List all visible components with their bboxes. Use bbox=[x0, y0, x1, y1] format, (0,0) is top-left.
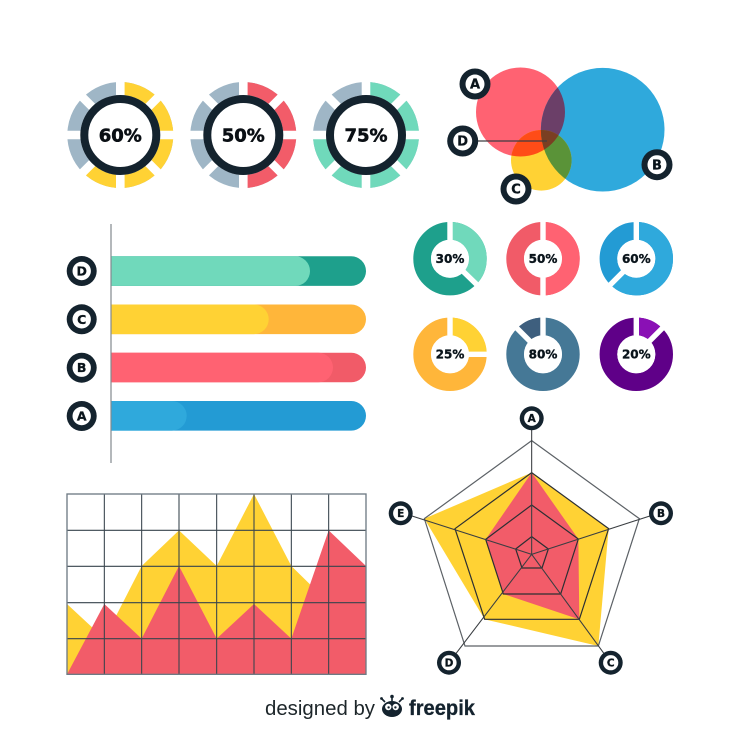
segmented ring: 60% bbox=[65, 80, 175, 190]
donut: 30% bbox=[422, 221, 478, 287]
yellow area series bbox=[67, 494, 366, 674]
donut: 20% bbox=[608, 316, 664, 382]
segmented ring: 75%: 75% bbox=[344, 126, 388, 147]
radar badge B bbox=[649, 501, 673, 525]
donut: 60% bbox=[608, 221, 664, 287]
footer credit bbox=[265, 695, 475, 720]
radar badge D: D bbox=[445, 657, 454, 669]
segmented ring: 50%: 50% bbox=[222, 126, 265, 147]
red radar series bbox=[486, 473, 579, 619]
venn badge C: C bbox=[511, 183, 521, 198]
segmented ring: 50% bbox=[188, 80, 298, 190]
bar B bbox=[111, 353, 366, 382]
segmented ring: 60%: 60% bbox=[99, 126, 142, 147]
venn badge C bbox=[500, 174, 532, 204]
radar badge D bbox=[437, 651, 461, 675]
bar badge C: C bbox=[77, 312, 86, 327]
horizontal bar chart bbox=[67, 224, 366, 463]
yellow radar series bbox=[424, 473, 609, 646]
donut: 80% bbox=[504, 315, 582, 394]
donut: 20%: 20% bbox=[622, 348, 651, 362]
venn badge A bbox=[460, 68, 490, 100]
donut: 80%: 80% bbox=[529, 348, 557, 362]
radar badge A: A bbox=[528, 413, 537, 425]
donut: 25% bbox=[422, 316, 488, 382]
venn badge D: D bbox=[457, 135, 468, 150]
footer credit: designed by bbox=[265, 698, 375, 720]
venn badge D bbox=[447, 126, 478, 156]
bar badge A bbox=[67, 401, 97, 431]
bar badge B: B bbox=[77, 360, 86, 375]
bar A bbox=[111, 401, 366, 431]
venn badge B bbox=[642, 149, 672, 180]
donut: 30%: 30% bbox=[436, 252, 464, 266]
bar badge C bbox=[67, 304, 97, 334]
venn badge B: B bbox=[652, 158, 662, 173]
donut: 60%: 60% bbox=[622, 252, 651, 266]
radar badge C: C bbox=[607, 657, 615, 669]
bar badge D bbox=[67, 256, 97, 286]
radar badge E bbox=[389, 501, 413, 525]
radar badge A bbox=[520, 406, 544, 430]
footer credit: freepik bbox=[409, 697, 475, 720]
venn badge A: A bbox=[470, 78, 480, 93]
bar badge A: A bbox=[77, 408, 87, 424]
donut: 50%: 50% bbox=[529, 252, 557, 266]
bar badge B bbox=[67, 353, 97, 383]
segmented ring: 75% bbox=[311, 80, 421, 190]
area chart bbox=[67, 494, 366, 674]
donut: 25%: 25% bbox=[436, 348, 464, 362]
donut: 50% bbox=[515, 221, 571, 297]
bar D bbox=[111, 256, 366, 286]
bar badge D: D bbox=[77, 264, 87, 278]
radar badge E: E bbox=[397, 508, 404, 520]
radar chart bbox=[389, 406, 673, 675]
bar C bbox=[111, 304, 366, 334]
red area series bbox=[67, 530, 366, 674]
radar badge B: B bbox=[657, 508, 665, 520]
icon: freepik mascot bbox=[380, 695, 404, 717]
radar badge C bbox=[599, 651, 623, 675]
venn diagram bbox=[447, 68, 672, 204]
